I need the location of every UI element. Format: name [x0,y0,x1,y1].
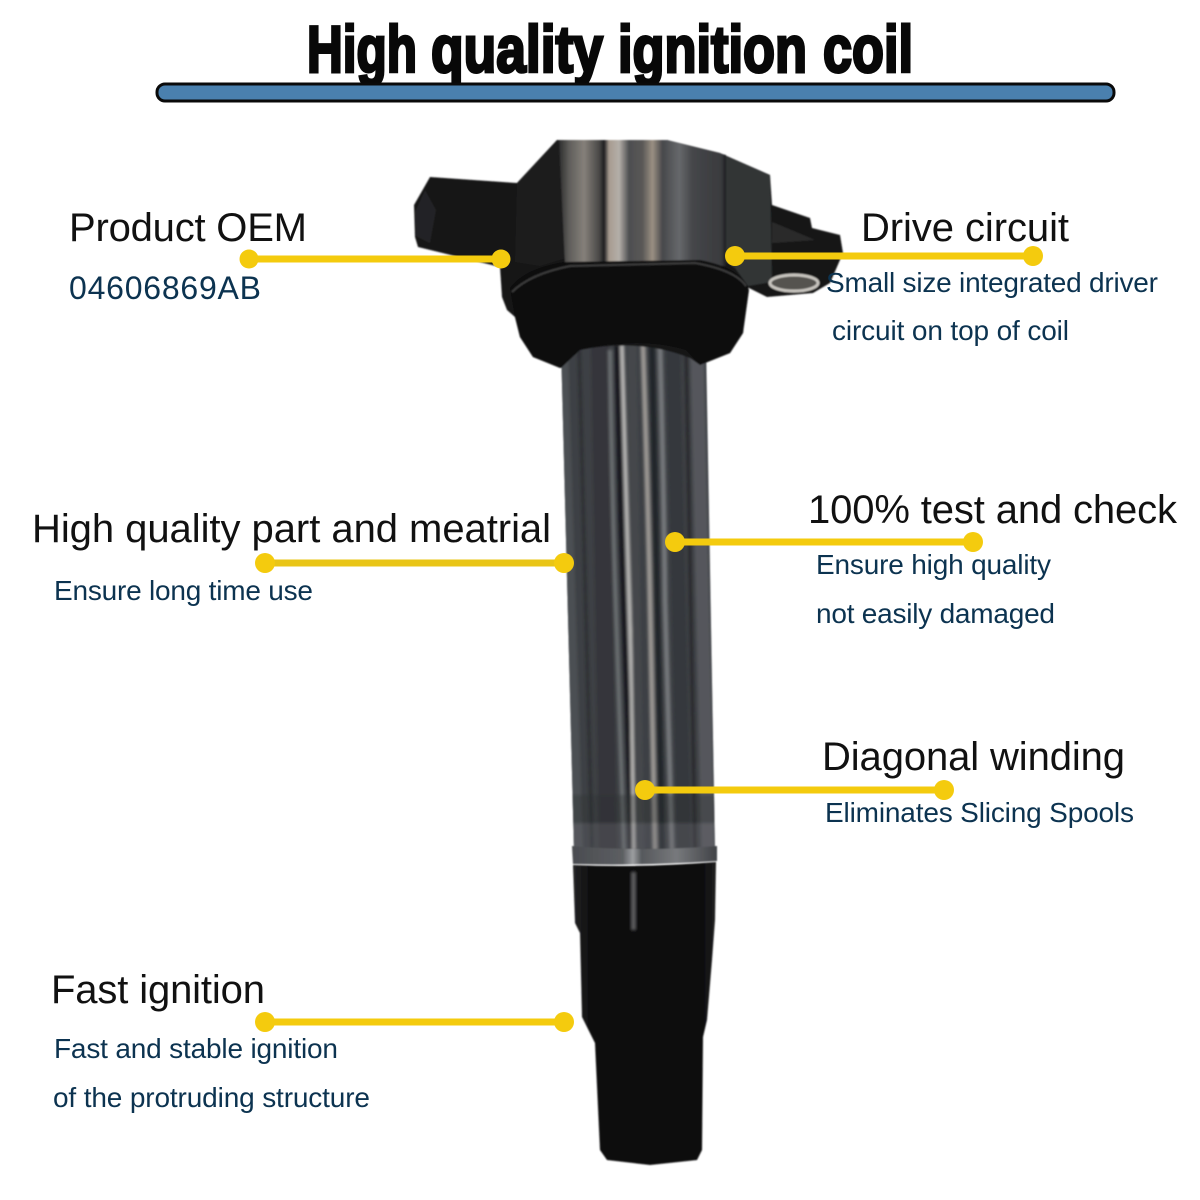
title: High [307,12,417,86]
callout: drive circuit [725,206,1158,346]
bracket slot [772,222,815,243]
ignition coil product illustration [414,140,843,1165]
callout: test and check: Ensure high quality [816,549,1051,580]
callout: part and material: High quality part and meatrial [32,507,551,551]
callout: fast ignition: Fast ignition [51,968,265,1012]
callout: drive circuit: circuit on top of coil [832,315,1069,346]
ring [572,846,717,865]
callout: diagonal winding [635,735,1134,828]
title: quality [431,12,603,86]
lower tube band [570,795,720,823]
callout: diagonal winding: Eliminates Slicing Spools [825,797,1134,828]
coil tube [560,344,716,850]
callout: test and check: 100% test and check [808,488,1178,532]
coil metallic body [559,140,726,266]
title [307,12,913,86]
callout: test and check [665,488,1178,629]
callout: drive circuit: Small size integrated driver [826,267,1158,298]
right body panel [726,156,772,286]
title bar [157,84,1114,101]
boot highlight [631,872,636,930]
collar ridge [512,263,746,292]
collar [510,260,749,368]
left housing panel [515,140,566,266]
title: ignition [618,12,807,86]
callout: product OEM: 04606869AB [69,270,261,306]
callout: part and material: Ensure long time use [54,575,313,606]
mounting eyelet [770,275,818,291]
callout: test and check: not easily damaged [816,598,1055,629]
title: coil [823,12,913,86]
coil housing shell [414,140,843,368]
boot [573,862,716,1165]
callout: fast ignition: Fast and stable ignition [54,1033,338,1064]
callout: diagonal winding: Diagonal winding [822,735,1125,779]
connector opening shade [415,190,436,243]
callout: fast ignition: of the protruding structure [53,1082,370,1113]
callout: product OEM [69,206,510,306]
callout: part and material [32,507,574,606]
callout: fast ignition [51,968,574,1113]
callout: drive circuit: Drive circuit [861,206,1069,250]
callout: product OEM: Product OEM [69,206,307,250]
